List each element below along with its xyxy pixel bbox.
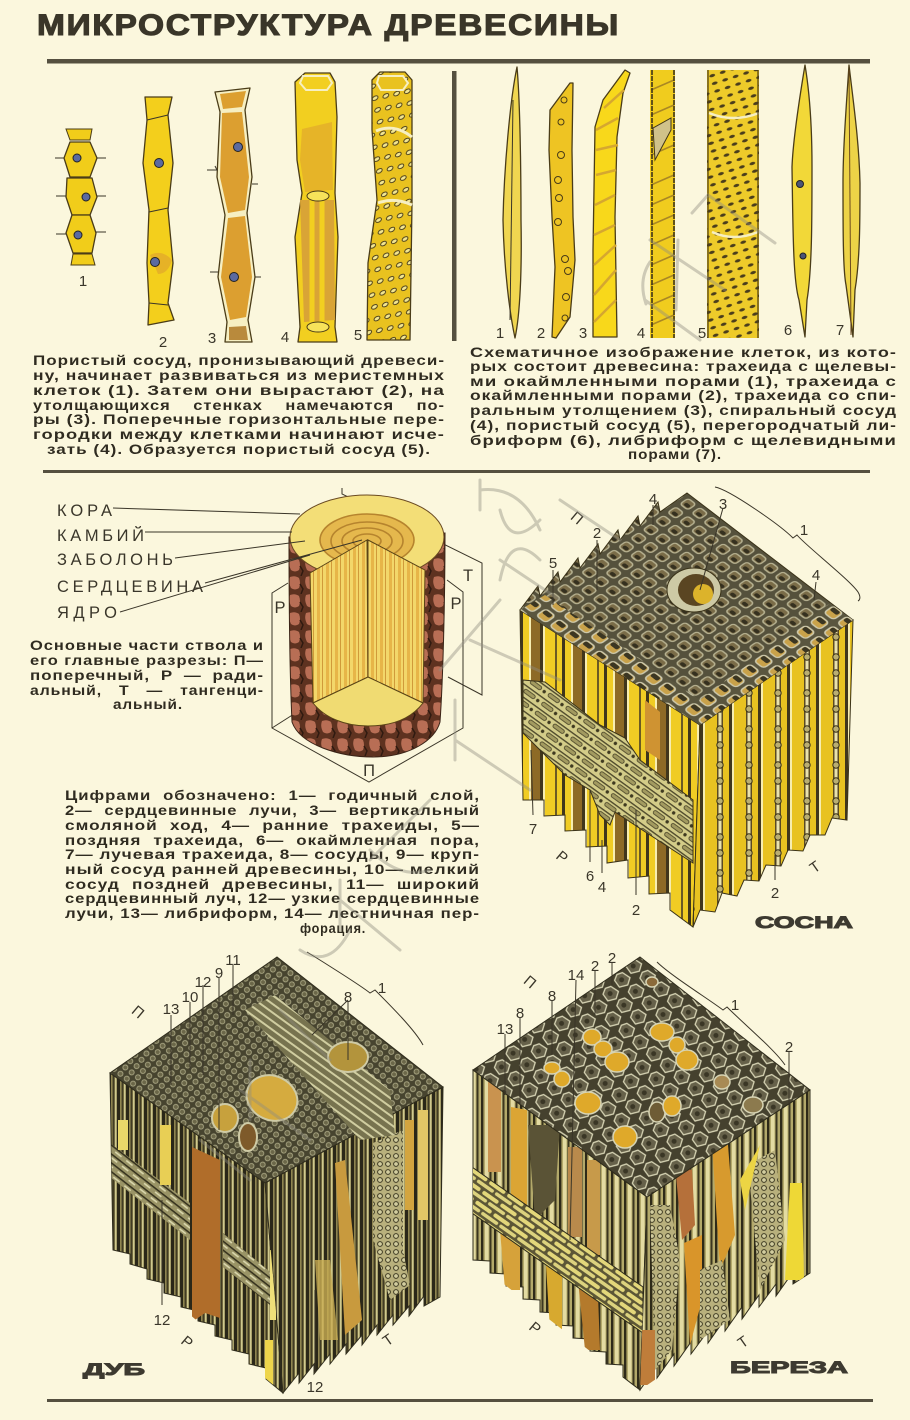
left face (473, 1070, 647, 1390)
numbers and bracket (497, 950, 793, 1352)
numbers and bracket: 8 (516, 1005, 524, 1022)
numbers and brackets: 2 (771, 885, 779, 902)
numbers and bracket: 2 (608, 950, 616, 967)
caption: schematic cells (470, 345, 897, 462)
caption: number legend: лучи, 13— либриформ, 14— лестничная пер- (65, 906, 480, 921)
name: oak: ДУБ (83, 1360, 145, 1379)
cell 5: pore vessel: 5 (354, 327, 362, 344)
numbers and brackets: 2 (632, 902, 640, 919)
cell 6: septate libriform (784, 65, 812, 339)
numbers and bracket: 8 (344, 989, 352, 1006)
numbers and bracket: 1 (378, 980, 386, 997)
caption: schematic cells: порами (7). (628, 447, 722, 462)
caption: pore vessel development: зать (4). Образуется пористый сосуд (5). (47, 442, 431, 457)
numbers and bracket (128, 952, 423, 1396)
section letters: Р (274, 599, 286, 617)
numbers and bracket: 13 (163, 1001, 179, 1018)
diagram: schematic wood cells (496, 65, 860, 342)
numbers and bracket: П (520, 972, 539, 992)
top face (520, 493, 853, 725)
trunk bark (289, 533, 445, 757)
numbers and brackets (529, 487, 860, 919)
section letters: Т (463, 567, 473, 585)
log part labels with leaders: СЕРДЦЕВИНА (57, 578, 203, 596)
log part labels with leaders: КАМБИЙ (57, 526, 144, 545)
log part labels with leaders: ЯДРО (57, 604, 117, 622)
caption: pore vessel development: клеток (1). Затем они вырастают (2), на (33, 383, 445, 398)
numbers and bracket: 2 (591, 958, 599, 975)
cell 3: thickening walls (207, 88, 261, 347)
caption: pore vessel development (33, 353, 445, 457)
vessels (544, 977, 763, 1148)
cell 4: disappearing partitions (281, 73, 338, 346)
caption: number legend: сердцевинный луч, 12— узкие сердцевинные (65, 891, 480, 906)
caption: schematic cells: бриформ (6), либриформ с щелевидными (470, 433, 897, 448)
numbers and brackets: 4 (649, 491, 657, 508)
left face (110, 1073, 283, 1393)
numbers and brackets: 1 (800, 522, 808, 539)
numbers and bracket: 8 (548, 988, 556, 1005)
cell 1: tracheid with slit pores: 1 (496, 325, 504, 342)
right face (640, 1090, 810, 1390)
caption: trunk sections: Основные части ствола и (30, 638, 264, 653)
caption: trunk sections: поперечный, Р — ради- (30, 668, 264, 683)
numbers and brackets: П (567, 508, 586, 528)
cell 3: tracheid with spiral thickening: 3 (579, 325, 587, 342)
cell 2: tracheid with bordered pores: 2 (537, 325, 545, 342)
caption: number legend: 7— лучевая трахеида, 8— сосуды, 9— круп- (65, 847, 480, 862)
cell 3: thickening walls: 3 (208, 330, 216, 347)
top face (110, 957, 443, 1183)
right face (693, 620, 853, 927)
cell 7: libriform with slit pores (836, 65, 860, 339)
cell 2: elongating cells: 2 (159, 334, 167, 351)
numbers and bracket: П (128, 1002, 147, 1022)
right face vessels and tangential ray (315, 1110, 428, 1340)
numbers and bracket: 10 (182, 989, 198, 1006)
numbers and brackets: 6 (586, 868, 594, 885)
cell 4: spiral vessel: 4 (637, 325, 645, 342)
numbers and brackets: 2 (593, 525, 601, 542)
left face vessels and brick ray (472, 1082, 643, 1350)
numbers and bracket: 12 (154, 1312, 170, 1329)
numbers and bracket: 2 (785, 1039, 793, 1056)
caption: pore vessel development: утолщающихся стенках намечаются по- (33, 398, 445, 413)
numbers and brackets: 3 (719, 496, 727, 513)
cell 1: meristem cells (55, 129, 106, 290)
cell 1: tracheid with slit pores (496, 67, 521, 342)
wood block: birch (472, 950, 848, 1390)
wood block: pine (520, 487, 860, 932)
top face (473, 957, 810, 1197)
cell 3: tracheid with spiral thickening (579, 70, 630, 342)
numbers and bracket: 9 (215, 965, 223, 982)
cell 5: pore vessel (698, 70, 759, 342)
caption: number legend: 2— сердцевинные лучи, 3— вертикальный (65, 803, 480, 818)
numbers and brackets: Р (552, 848, 571, 867)
numbers and bracket: Р (525, 1319, 544, 1338)
cell 4: spiral vessel (637, 70, 675, 342)
caption: schematic cells: ральным утолщением (3), спиральный сосуд (470, 403, 897, 418)
bottom cross section (313, 677, 423, 726)
numbers and bracket: 14 (568, 967, 584, 984)
caption: trunk sections (30, 638, 264, 712)
handwritten watermark strokes (200, 195, 775, 1180)
resin duct (667, 568, 721, 612)
cell 4: disappearing partitions: 4 (281, 329, 289, 346)
section letters: П (363, 762, 375, 780)
section plane outlines (272, 488, 482, 782)
cell 7: libriform with slit pores: 7 (836, 322, 844, 339)
top cross section (290, 495, 444, 579)
caption: pore vessel development: ну, начинает развиваться из меристемных (33, 368, 445, 383)
log part labels with leaders (57, 502, 362, 622)
lighter earlywood cells (520, 595, 853, 725)
wood block: oak (83, 952, 443, 1396)
left face rays and large vessel (110, 1120, 280, 1385)
caption: number legend (65, 788, 480, 936)
caption: number legend: поздняя трахеида, 6— окаймленная пора, (65, 833, 480, 848)
caption: number legend: Цифрами обозначено: 1— годичный слой, (65, 788, 480, 803)
caption: trunk sections: его главные разрезы: П— (30, 653, 264, 668)
caption: number legend: сосуд поздней древесины, 11— широкий (65, 877, 480, 892)
caption: schematic cells: Схематичное изображение клеток, из кото- (470, 345, 897, 360)
cell 1: meristem cells: 1 (79, 273, 87, 290)
title: МИКРОСТРУКТУРА ДРЕВЕСИНЫ (37, 9, 620, 42)
cell 5: pore vessel (354, 72, 412, 344)
ray band (523, 680, 693, 863)
numbers and brackets: Т (807, 858, 824, 877)
caption: schematic cells: (4), пористый сосуд (5), перегородчатый ли- (470, 418, 897, 433)
log diagram with section planes (272, 488, 482, 782)
cell 6: septate libriform: 6 (784, 322, 792, 339)
orange tracheid (645, 700, 660, 760)
left face (520, 610, 700, 927)
name: birch: БЕРЕЗА (730, 1358, 848, 1377)
numbers and brackets: 4 (598, 879, 606, 896)
section letters: Р (450, 595, 462, 613)
numbers and bracket: 12 (307, 1379, 323, 1396)
numbers and brackets: 5 (549, 555, 557, 572)
caption: pore vessel development: Пористый сосуд, пронизывающий древеси- (33, 353, 445, 368)
caption: pore vessel development: ры (3). Поперечные горизонтальные пере- (33, 412, 445, 427)
numbers and bracket: Р (177, 1333, 196, 1352)
caption: trunk sections: альный. (113, 697, 183, 712)
caption: number legend: ный сосуд ранней древесины, 10— мелкий (65, 862, 480, 877)
caption: number legend: смоляной ход, 4— ранние трахеиды, 5— (65, 818, 480, 833)
numbers and bracket: 13 (497, 1021, 513, 1038)
caption: schematic cells: окаймленными порами (2), трахеида со спи- (470, 388, 897, 403)
log part labels with leaders: ЗАБОЛОНЬ (57, 551, 173, 569)
caption: trunk sections: альный, Т — тангенци- (30, 683, 264, 698)
numbers and bracket: Т (380, 1331, 397, 1350)
vessels (212, 1042, 368, 1151)
caption: schematic cells: рых состоит древесина: трахеида с щелевы- (470, 359, 897, 374)
cell 2: tracheid with bordered pores (537, 83, 575, 342)
numbers and bracket: Т (735, 1333, 752, 1352)
name: pine: СОСНА (755, 913, 853, 932)
numbers and bracket: 12 (195, 974, 211, 991)
right face (265, 1087, 443, 1393)
heartwood rings (320, 514, 414, 566)
wide ray (245, 995, 395, 1140)
section letters (274, 567, 473, 780)
caption: schematic cells: ми окаймленными порами (1), трахеида с (470, 374, 897, 389)
log part labels with leaders: КОРА (57, 502, 112, 520)
numbers and bracket: 1 (731, 997, 739, 1014)
numbers and brackets: 4 (812, 567, 820, 584)
right face vessels (640, 1143, 804, 1385)
caption: number legend: форация. (300, 921, 366, 936)
cell 5: pore vessel: 5 (698, 325, 706, 342)
cut faces (310, 540, 368, 703)
numbers and bracket: 11 (225, 952, 241, 969)
diagram: stages of pore vessel development (55, 72, 412, 351)
caption: pore vessel development: городки между клетками начинают исче- (33, 427, 445, 442)
numbers and brackets: 7 (529, 821, 537, 838)
cell 2: elongating cells (143, 97, 174, 351)
